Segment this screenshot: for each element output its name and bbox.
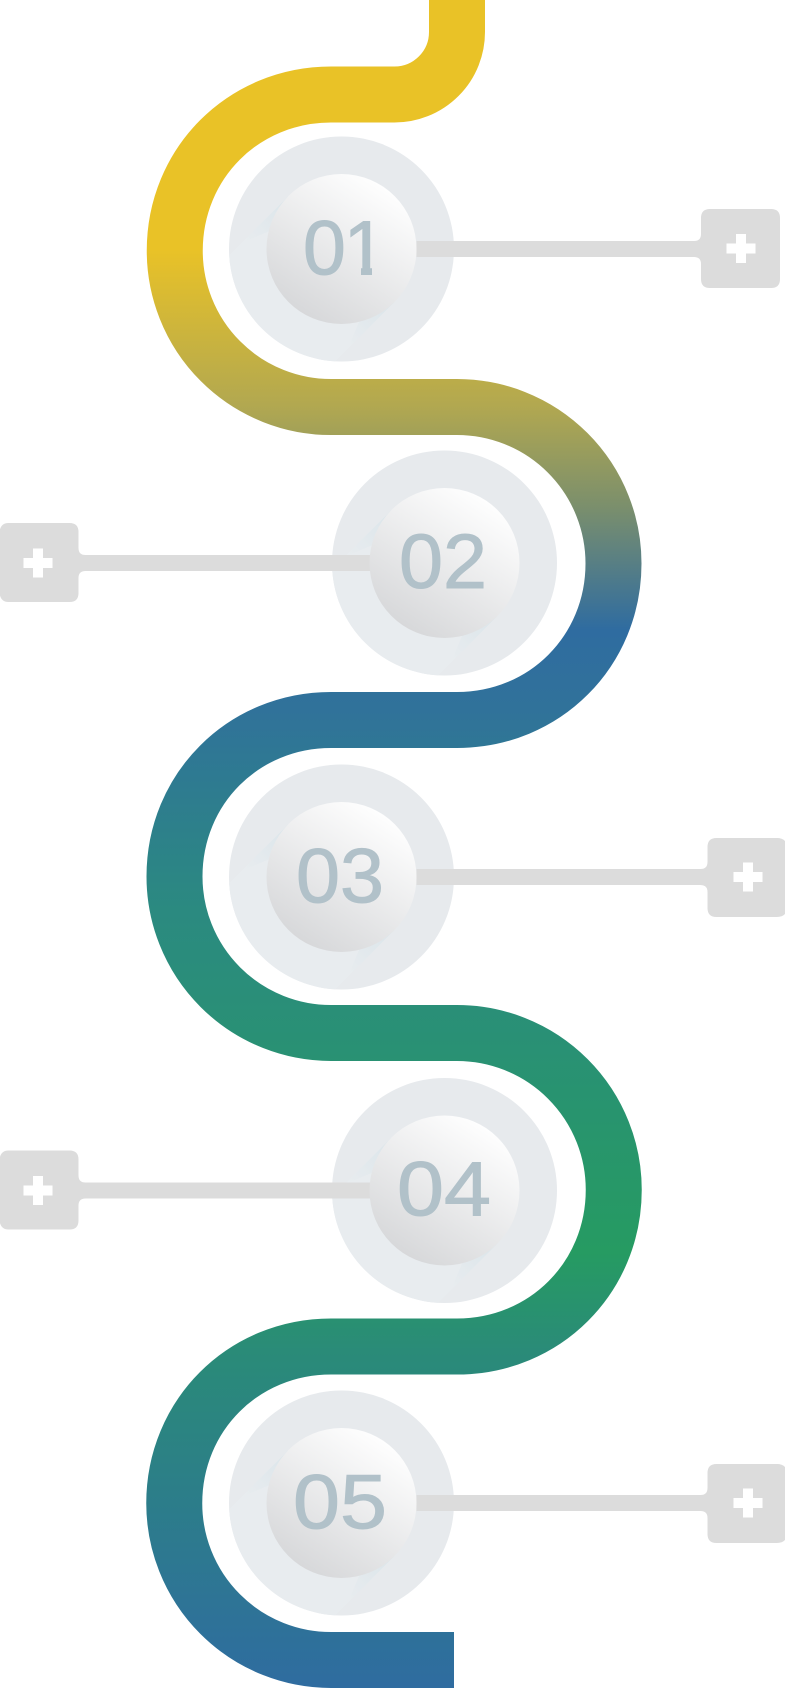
long shadow 01: [216, 196, 394, 374]
outer circle 02: [332, 450, 557, 676]
icon: plus 01: [726, 234, 756, 263]
winding ribbon path: [174, 0, 614, 1660]
number 02: 02: [399, 519, 487, 605]
connector and card 02: [0, 523, 380, 602]
long shadow 03: [216, 824, 394, 1002]
icon: plus 03: [734, 862, 762, 892]
inner ball 03: [266, 802, 416, 952]
inner ball 04: [370, 1116, 520, 1266]
icon: plus 02: [24, 548, 52, 578]
icon: plus 05: [734, 1488, 762, 1518]
inner ball 02: [370, 488, 520, 638]
connector and card 01: [400, 209, 780, 288]
line overlap 04: [332, 1182, 370, 1198]
inner ball 05: [266, 1428, 416, 1578]
line overlap 02: [332, 555, 370, 571]
number 03: 03: [296, 834, 384, 920]
long shadow 04: [320, 1138, 498, 1316]
step 05: [216, 1390, 785, 1628]
inner ball 01: [266, 174, 416, 324]
long shadow 02: [320, 510, 498, 688]
icon: plus 04: [24, 1176, 52, 1205]
connector and card 03: [400, 838, 785, 917]
step 04: [0, 1078, 557, 1316]
line overlap 03: [416, 869, 454, 885]
line overlap 05: [416, 1495, 454, 1511]
step 01: [216, 136, 780, 374]
connector and card 05: [400, 1464, 785, 1543]
outer circle 03: [229, 764, 454, 990]
step 03: [216, 764, 785, 1002]
outer circle 05: [229, 1390, 454, 1616]
number 05: 05: [293, 1460, 387, 1546]
number 04: 04: [397, 1146, 491, 1232]
connector and card 04: [0, 1150, 380, 1230]
line overlap 01: [416, 241, 454, 257]
outer circle 04: [332, 1078, 557, 1303]
number 01: 01: [303, 206, 386, 292]
step 02: [0, 450, 557, 688]
long shadow 05: [216, 1450, 394, 1628]
outer circle 01: [229, 136, 454, 362]
